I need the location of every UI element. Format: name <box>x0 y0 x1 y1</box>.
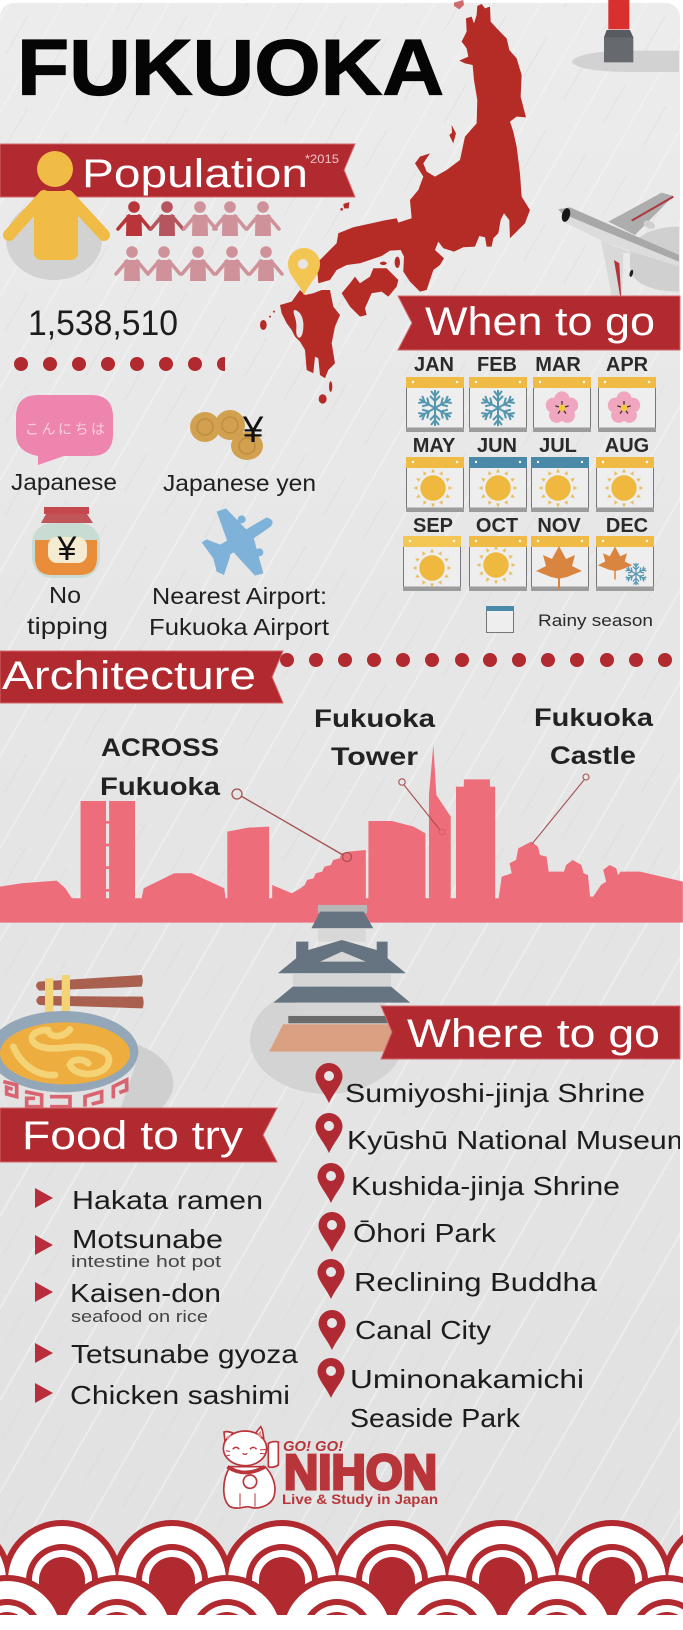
month labels: NOV <box>537 515 581 537</box>
text: language: Japanese <box>11 469 117 495</box>
where to go list: Sumiyoshi-jinja Shrine <box>345 1078 645 1108</box>
food list: Hakata ramen <box>72 1185 263 1215</box>
where to go banner <box>381 1006 680 1059</box>
title: FUKUOKA <box>17 22 444 112</box>
panel: quick facts <box>11 395 330 640</box>
icon: ramen bowl <box>0 975 173 1128</box>
text: nearest airport <box>149 583 330 640</box>
icon: lucky cat <box>223 1427 278 1508</box>
callout: Fukuoka Tower: Fukuoka <box>314 705 436 733</box>
icon: tip jar <box>32 507 100 578</box>
icon: pink speech bubble: こんにちは <box>25 421 105 437</box>
dotted divider right <box>280 653 672 667</box>
Shikoku <box>342 268 398 317</box>
month labels: AUG <box>605 435 649 457</box>
where to go list: Reclining Buddha <box>354 1267 598 1297</box>
panel: food to try <box>0 1108 299 1410</box>
population number: 1,538,510 <box>28 304 178 343</box>
logo wordmark: NIHON <box>284 1446 437 1500</box>
panel: architecture <box>0 651 683 923</box>
month labels: OCT <box>476 515 518 537</box>
where to go list: Ōhori Park <box>353 1218 497 1248</box>
month labels: JUN <box>477 435 517 457</box>
month labels <box>413 354 649 537</box>
callout: ACROSS Fukuoka: Fukuoka <box>100 773 221 801</box>
icon: pink speech bubble <box>16 395 113 465</box>
legend: rainy season <box>486 606 653 632</box>
callout: Fukuoka Castle: Castle <box>550 742 636 770</box>
where to go list: Canal City <box>355 1315 491 1345</box>
food list: intestine hot pot <box>71 1252 221 1271</box>
when to go banner: When to go <box>425 300 655 344</box>
architecture banner <box>0 651 283 703</box>
month labels: MAY <box>413 435 456 457</box>
where to go list: Kyūshū National Museum <box>347 1125 683 1155</box>
where to go list <box>316 1063 683 1433</box>
month labels: FEB <box>477 354 517 376</box>
population banner <box>0 144 355 197</box>
icon: castle illustration <box>250 905 410 1094</box>
text: nearest airport: Nearest Airport: <box>152 583 327 609</box>
callout: Fukuoka Tower: Tower <box>331 743 418 771</box>
callout: ACROSS Fukuoka: ACROSS <box>101 734 219 762</box>
month labels: DEC <box>606 515 648 537</box>
islands <box>454 0 464 9</box>
icon: Fukuoka location pin <box>288 248 320 295</box>
icon: yen coins: ¥ <box>242 409 264 450</box>
where to go list: Uminonakamichi <box>350 1364 584 1394</box>
month labels: JUL <box>539 435 577 457</box>
food list: Motsunabe <box>72 1224 223 1254</box>
where to go list: Kushida-jinja Shrine <box>351 1171 620 1201</box>
text: no tipping: No <box>49 582 81 608</box>
food list: seafood on rice <box>71 1307 208 1326</box>
food list: Chicken sashimi <box>70 1380 290 1410</box>
text: currency: Japanese yen <box>163 470 316 496</box>
food bullet arrows <box>35 1188 53 1403</box>
population banner: Population <box>82 152 308 196</box>
text: no tipping <box>27 582 108 639</box>
month labels: SEP <box>413 515 453 537</box>
Honshu and Hokkaido <box>317 4 530 292</box>
where to go list: Seaside Park <box>350 1403 521 1433</box>
population banner: *2015 <box>305 152 339 166</box>
logo wordmark: GO! GO! <box>283 1438 343 1455</box>
month labels: JAN <box>414 354 454 376</box>
logo: Go! Go! Nihon <box>223 1427 438 1508</box>
icon: yen coins <box>190 409 264 460</box>
callout: ACROSS Fukuoka <box>100 734 352 862</box>
icon: tip jar: ¥ <box>57 530 77 568</box>
food list <box>70 1185 299 1410</box>
calendar grid <box>403 377 656 591</box>
text: no tipping: tipping <box>27 613 108 639</box>
callout: Fukuoka Castle: Fukuoka <box>534 704 654 732</box>
callout: Fukuoka Tower <box>314 705 445 835</box>
where to go banner: Where to go <box>407 1012 660 1056</box>
pictogram: population people rows <box>116 201 282 281</box>
icon: airplane <box>558 193 679 306</box>
panel: where to go <box>316 1006 683 1433</box>
food list: Tetsunabe gyoza <box>71 1339 299 1369</box>
food banner <box>0 1108 277 1162</box>
legend: rainy season: Rainy season <box>538 611 653 630</box>
month labels: APR <box>606 354 649 376</box>
icon: blue airplane <box>202 508 273 576</box>
callout: Fukuoka Castle <box>532 704 654 844</box>
logo wordmark: Live & Study in Japan <box>282 1491 438 1507</box>
food list: Kaisen-don <box>70 1278 221 1308</box>
text: nearest airport: Fukuoka Airport <box>149 614 330 640</box>
architecture banner: Architecture <box>2 654 256 698</box>
Kyushu <box>280 290 340 378</box>
when to go banner <box>398 296 680 350</box>
icon: lantern post with shadow <box>572 0 679 72</box>
icon: large yellow person <box>6 151 104 280</box>
month labels: MAR <box>535 354 581 376</box>
panel: population <box>0 144 355 371</box>
map of Japan <box>260 0 530 404</box>
wave pattern footer <box>0 1520 683 1615</box>
panel: when to go <box>398 296 680 632</box>
food banner: Food to try <box>22 1114 243 1158</box>
skyline silhouette <box>0 745 683 923</box>
dotted divider left <box>14 357 231 371</box>
